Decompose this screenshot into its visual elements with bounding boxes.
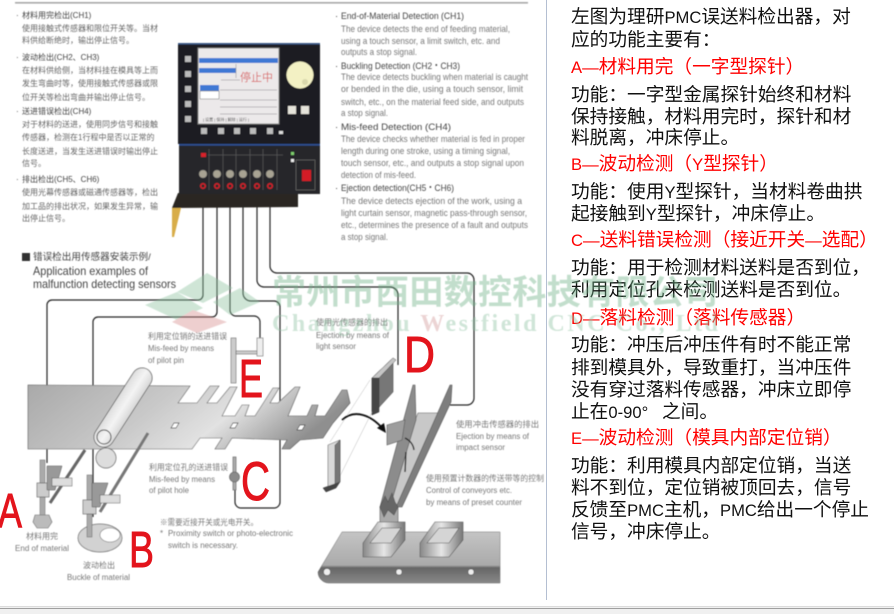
english detection description: The device checks whether material is fed in proper (341, 134, 525, 145)
english detection description: · (335, 183, 338, 194)
right explanation text: 起接触到Y型探针，冲床停止。 (571, 203, 825, 224)
application heading (22, 251, 176, 291)
right explanation text: 止在0-90° (571, 401, 648, 422)
chinese detection description: 长度送进，当发生送进错误时输出停止 (22, 146, 158, 156)
sensor captions: Ejection by means of (456, 432, 530, 441)
light sensor upper (372, 358, 396, 415)
bottom window edge (0, 606, 894, 614)
chinese detection description: 信号。 (22, 158, 46, 168)
function keys (185, 56, 273, 134)
english detection description: Mis-feed Detection (CH4) (341, 122, 451, 133)
english detection description: switch, etc., on the material feed side, and outputs (341, 97, 524, 108)
sensor cables (47, 207, 474, 517)
watermark (145, 265, 719, 337)
chinese detection description: 加工品的排出状况，如果发生异常，输 (22, 201, 158, 211)
dial (286, 62, 314, 88)
english detection description: using a touch sensor, a limit switch, etc. and (341, 36, 500, 47)
sensor B assembly (78, 433, 148, 552)
sensor captions: 利用定位销的送进错误 (148, 331, 227, 341)
english detection description: touch sensor, etc., and outputs a stop signal upon (341, 158, 524, 169)
sensor captions: 波动检出 (83, 560, 115, 570)
chinese detection description: 发生弯曲时等，使用接触式传感器或限 (22, 78, 158, 88)
sensor captions: switch is necessary. (168, 541, 238, 550)
english detection description: · (335, 61, 338, 72)
english detection description: length during one stroke, using a timing signal, (341, 146, 510, 157)
right explanation text: 信号，冲床停止。 (571, 521, 720, 542)
right explanation text: 料不到位，定位销被顶回去，信号 (571, 477, 851, 498)
sensor A assembly (33, 450, 85, 528)
english detection description: End-of-Material Detection (CH1) (341, 11, 464, 22)
english detection description: The device detects buckling when material is caught (341, 72, 528, 83)
chinese detection description (16, 10, 158, 223)
right explanation text: 没有穿过落料传感器，冲床立即停 (571, 379, 851, 400)
right explanation text: 利用定位孔来检测送料是否到位。 (571, 279, 851, 300)
red indicators (201, 184, 272, 188)
sensor captions: Mis-feed by means (148, 344, 214, 353)
upper control panel (178, 43, 320, 144)
collection box 1 (363, 522, 405, 557)
right explanation text: 左图为理研PMC误送料检出器，对 (571, 6, 851, 27)
sensor captions: ※需要近接开关或光电开关。 (160, 517, 258, 527)
toggle switches (199, 170, 274, 178)
light beams (330, 380, 372, 478)
english detection description: outputs a stop signal. (341, 47, 417, 58)
sensor captions: impact sensor (456, 443, 505, 452)
sensor captions: 利用定位孔的送进错误 (149, 462, 228, 472)
sensor captions: 使用预置计数器的传送带等的控制 (426, 473, 544, 483)
right explanation text: 功能：用于检测材料送料是否到位， (571, 257, 870, 278)
sensor captions: by means of preset counter (426, 498, 522, 507)
chinese detection description: 传感器，检测在1行程中是否以正常的 (22, 132, 154, 142)
lcd screen (198, 48, 279, 124)
english detection description: etc., determines the presence of a fault and outputs (341, 220, 528, 231)
chinese detection description: · (16, 11, 19, 20)
english detection description (335, 11, 528, 243)
conveyor (318, 522, 500, 583)
ejection chute (380, 385, 452, 523)
red letter markers: D (404, 326, 435, 383)
feed rollers (96, 378, 142, 468)
english detection description: detection of mis-feed. (341, 170, 416, 181)
chinese detection description: 送进错误检出(CH4) (22, 106, 92, 116)
lower switch panel (179, 144, 320, 194)
chinese detection description: · (16, 175, 19, 184)
right explanation text (571, 6, 878, 542)
panel divider (546, 0, 547, 600)
watermark chinese name: 常州市西田数控科技有限公司 (272, 265, 718, 314)
right explanation text: 保持接触，材料用完时，探针和材 (571, 106, 851, 127)
right explanation text: 料脱离，冲床停止。 (571, 127, 739, 148)
left reference scan (15, 2, 544, 583)
english detection description: The device detects ejection of the work, using a (341, 196, 523, 207)
chinese detection description: 位开关等检出弯曲并输出停止信号。 (22, 92, 150, 102)
application heading: Application examples of (33, 264, 149, 278)
watermark logo (145, 273, 260, 333)
chinese detection description: 在材料供给侧，当材料挂在模具等上而 (22, 65, 158, 75)
sensor captions: 材料用完 (26, 531, 58, 541)
english detection description: · (335, 122, 338, 133)
watermark english name: Changzhou Westfield CNC Co., Ltd (272, 311, 719, 337)
sensor captions: * (160, 529, 163, 538)
english detection description: a stop signal. (341, 232, 388, 243)
english detection description: The device detects the end of feeding material, (341, 24, 510, 35)
control unit device (172, 43, 320, 237)
sensor captions: Ejection by means of (316, 331, 390, 340)
english detection description: or bended in the die, using a touch sensor, limit (341, 84, 523, 95)
english detection description: a stop signal. (341, 108, 388, 119)
light sensor lower (323, 440, 340, 492)
stop button (296, 160, 315, 190)
right explanation text: E—波动检测（模具内部定位销） (571, 427, 842, 448)
chinese detection description: · (16, 107, 19, 116)
right explanation text: D—落料检测（落料传感器） (571, 307, 805, 328)
application heading: 错误检出用传感器安装示例/ (33, 251, 151, 263)
collection box 2 (420, 522, 463, 557)
ejection arrow (342, 414, 383, 429)
english detection description: · (335, 11, 338, 22)
sensor captions: light sensor (316, 342, 356, 351)
right explanation text: 功能：利用模具内部定位销，当送 (571, 455, 852, 476)
chinese detection description: 对于材料的送进，使用同步信号和接触 (22, 119, 158, 129)
sensor captions: Buckle of material (67, 573, 130, 582)
red letter markers (0, 326, 435, 578)
metal strip (28, 385, 350, 449)
right explanation text: 功能：冲压后冲压件有时不能正常 (571, 334, 851, 355)
chinese detection description: 材料用完检出(CH1) (22, 10, 92, 20)
right explanation text: 功能：使用Y型探针，当材料卷曲拱 (571, 181, 862, 202)
pilot holes (171, 423, 305, 430)
right explanation text: B—波动检测（Y型探针） (571, 153, 778, 174)
english detection description: Buckling Detection (CH2・CH3) (341, 61, 460, 72)
sensor captions: 使用光传感器的排出 (316, 317, 388, 327)
sensor E pilot pin (231, 338, 263, 383)
right explanation text: C—送料错误检测（接近开关—选配） (571, 229, 878, 250)
red letter markers: B (129, 521, 154, 578)
red letter markers: C (241, 450, 270, 512)
chinese detection description: 波动检出(CH2、CH3) (22, 52, 100, 62)
right explanation text: A—材料用完（一字型探针） (571, 56, 804, 77)
sensor captions: 使用冲击传感器的排出 (456, 419, 539, 429)
sensor captions: Control of conveyors etc. (426, 486, 512, 495)
sensor captions: Mis-feed by means (149, 475, 215, 484)
sensor captions: End of material (15, 544, 69, 553)
yellow flap (172, 208, 181, 237)
sensor captions: of pilot hole (149, 486, 190, 495)
lcd screen: | 设置 | 保持 | 解除 | 运行 | (203, 116, 249, 122)
chinese detection description: 料供给断绝时，输出停止信号。 (22, 35, 134, 45)
sensor captions: Proximity switch or photo-electronic (168, 529, 293, 538)
chinese detection description: 使用光幕传感器或磁通传感器等，检出 (22, 187, 158, 197)
chinese detection description: 排出检出(CH5、CH6) (22, 174, 100, 184)
application heading: malfunction detecting sensors (33, 277, 176, 291)
sensor captions (15, 317, 544, 582)
right explanation text: 反馈至PMC主机，PMC给出一个停止 (571, 499, 869, 520)
chinese detection description: · (16, 53, 19, 62)
sensor C pilot hole (230, 457, 240, 490)
right explanation text: 之间。 (662, 401, 718, 422)
right explanation text: 排到模具外，导致重打，当冲压件 (571, 357, 851, 378)
sensor captions: of pilot pin (148, 356, 184, 365)
chinese detection description: 使用接触式传感器和限位开关等。当材 (22, 23, 158, 33)
base bracket (172, 193, 298, 208)
right explanation text: 功能：一字型金属探针始终和材料 (571, 84, 852, 105)
chinese detection description: 出停止信号。 (22, 213, 70, 223)
english detection description: light curtain sensor, magnetic pass-through sensor, (341, 208, 527, 219)
english detection description: Ejection detection(CH5・CH6) (341, 183, 454, 194)
lcd screen: 停止中 (240, 70, 273, 84)
red letter markers: E (239, 349, 263, 409)
right explanation text: 应的功能主要有： (571, 29, 720, 50)
